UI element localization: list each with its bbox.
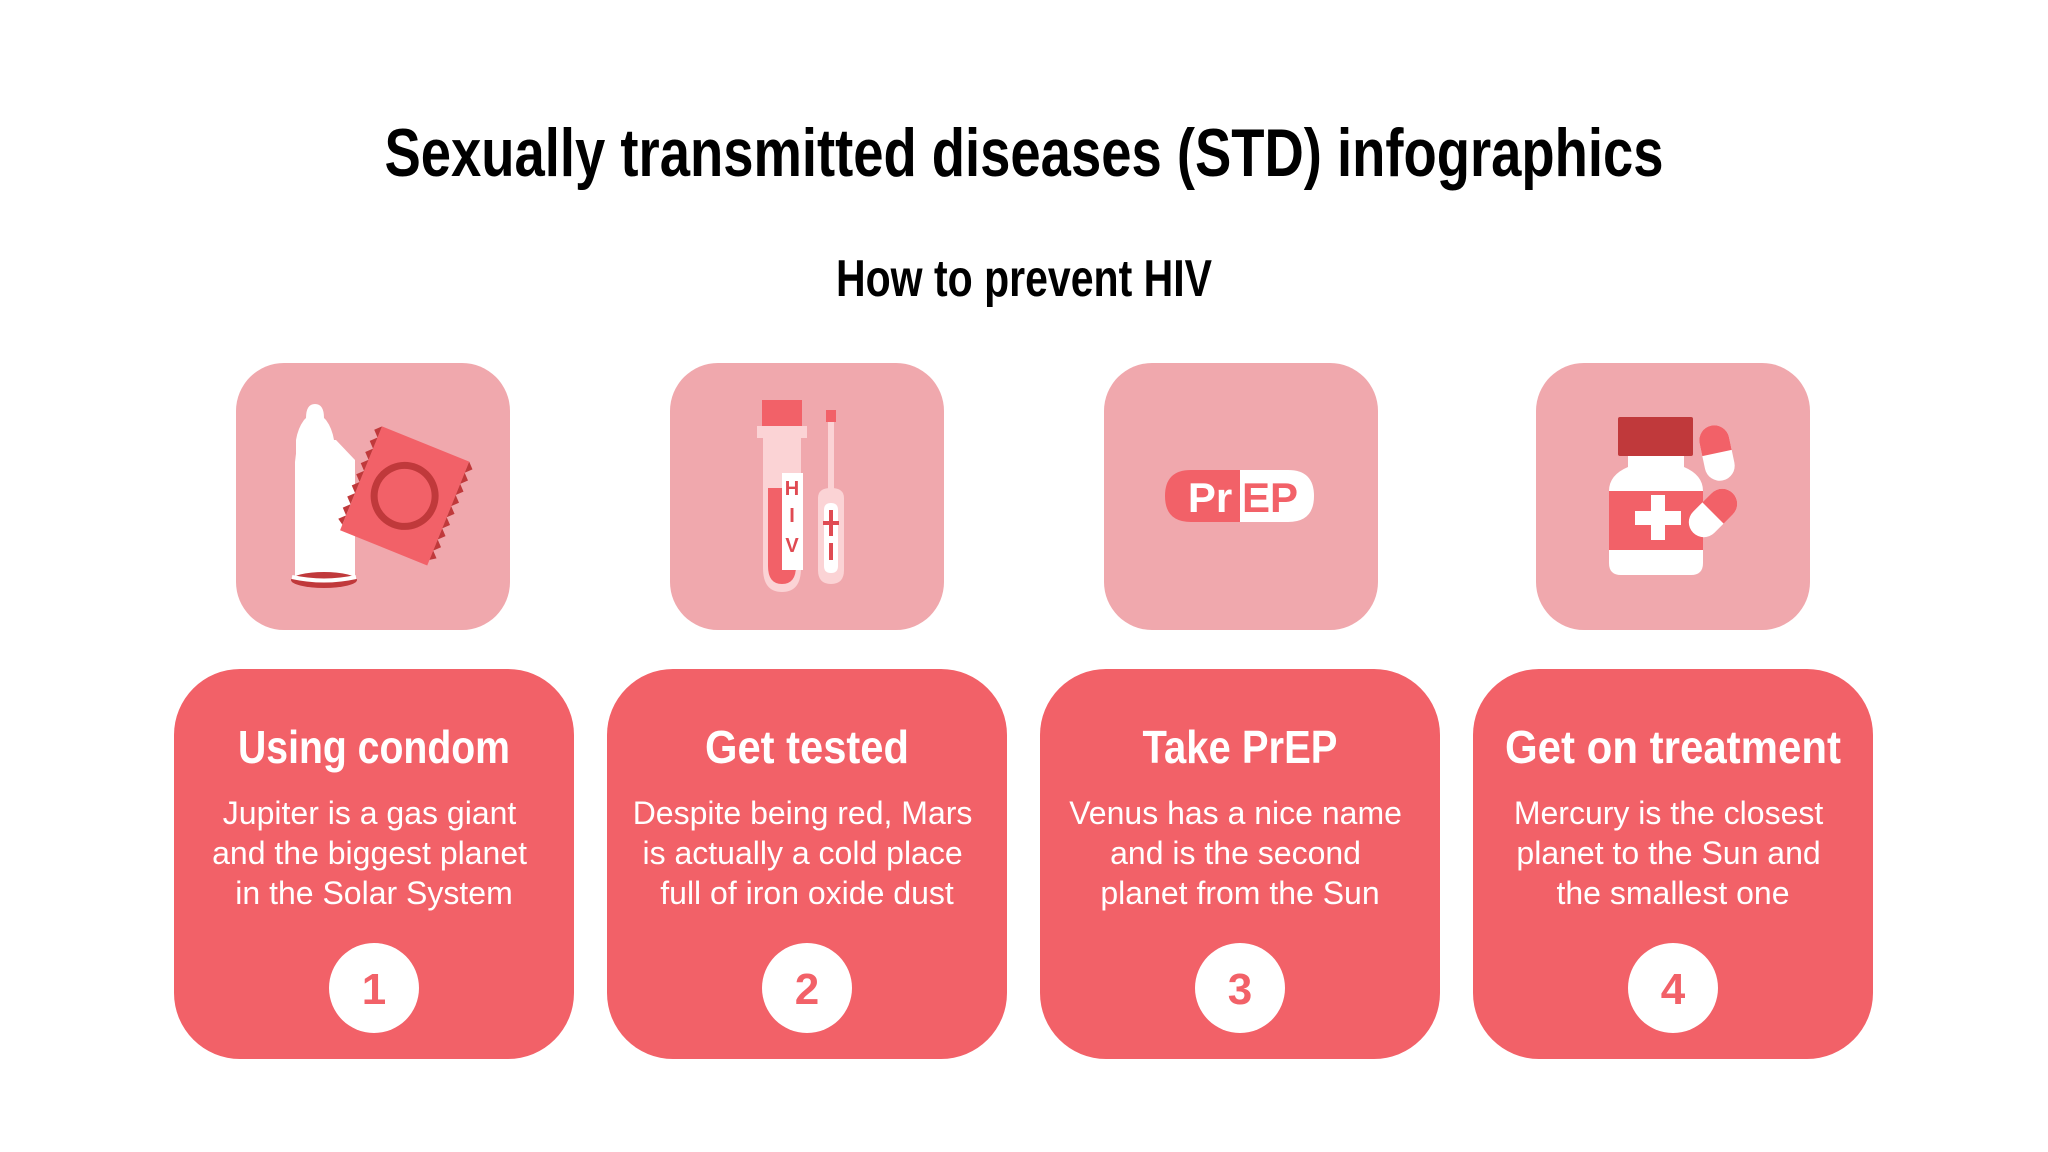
subtitle: How to prevent HIV [836,250,1212,308]
icon: test tube [757,400,844,592]
body 3: planet from the Sun [1100,875,1380,911]
number 3: 3 [1228,965,1252,1014]
card 3: take PrEP [1040,669,1440,1059]
icon: PrEP pill [1165,470,1314,522]
card 2: get tested [607,669,1007,1059]
icon: test tube: H [785,478,799,500]
icon: test tube: I [789,505,795,527]
icon: PrEP pill: Pr [1188,474,1232,521]
body 1: in the Solar System [235,875,513,911]
number 2: 2 [795,965,819,1014]
icon: condom [291,404,475,588]
body 4: Mercury is the closest [1514,795,1823,831]
number 3 [1195,943,1285,1033]
icon box: condom [236,363,510,630]
number 4 [1628,943,1718,1033]
body 3: Venus has a nice name [1069,795,1402,831]
icon: medicine bottle [1609,417,1743,575]
title: Sexually transmitted diseases (STD) infographics [384,115,1664,191]
icon box: HIV test [670,363,944,630]
heading 3: Take PrEP [1142,721,1338,773]
card 1: using condom [174,669,574,1059]
icon box: treatment [1536,363,1810,630]
body 3: and is the second [1110,835,1361,871]
body 1: Jupiter is a gas giant [223,795,516,831]
heading 2: Get tested [705,721,909,773]
body 4: planet to the Sun and [1516,835,1821,871]
number 1: 1 [362,965,386,1014]
body 2: full of iron oxide dust [660,875,954,911]
number 1 [329,943,419,1033]
heading 1: Using condom [238,721,510,773]
body 2: Despite being red, Mars [633,795,972,831]
body 4: the smallest one [1556,875,1790,911]
body 1: and the biggest planet [212,835,527,871]
number 2 [762,943,852,1033]
icon box: PrEP [1104,363,1378,630]
body 2: is actually a cold place [642,835,963,871]
card 4: get on treatment [1473,669,1873,1059]
icon: PrEP pill: EP [1242,474,1298,521]
heading 4: Get on treatment [1505,721,1841,773]
number 4: 4 [1661,965,1686,1014]
icon: test tube: V [785,535,799,557]
